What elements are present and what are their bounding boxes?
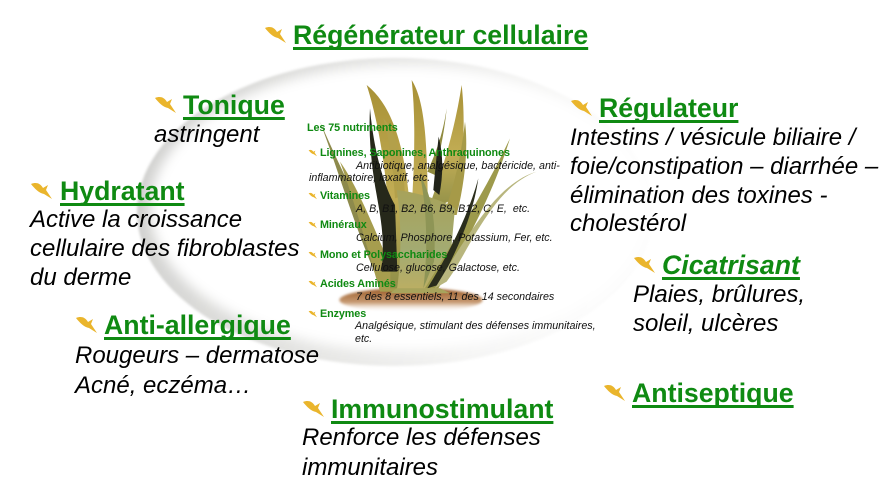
item: Vitamines [308,190,530,215]
description: foie/constipation – diarrhée – [570,153,878,180]
description: Rougeurs – dermatose [75,342,319,369]
description: Renforce les défenses [302,424,541,451]
item: Vitamines: A, B, B1, B2, B6, B9, B12, C, E, etc. [356,203,530,215]
item: Lignines [308,147,560,184]
heading: Hydratant [60,176,185,206]
item: Lignines: Antibiotique, analgésique, bactéricide, anti- [356,160,560,172]
description [633,281,805,337]
heading: Régénérateur cellulaire [265,20,588,50]
icon: bird [634,257,655,273]
item: Vitamines: Vitamines [320,190,370,202]
item: Mono et Polysaccharides [308,249,520,274]
icon: bird [604,385,625,401]
heading: Tonique [183,90,285,120]
item: Lignines: inflammatoire, laxatif, etc. [309,172,430,184]
item: Acides Aminés: 7 des 8 essentiels, 11 des 14 secondaires [356,291,554,303]
description: soleil, ulcères [633,310,778,337]
item: Enzymes [308,308,596,345]
heading: Antiseptique [632,378,794,408]
icon: bird [571,100,592,116]
icon: bird [265,27,286,43]
item: Enzymes: Analgésique, stimulant des défenses immunitaires, [355,320,596,332]
description: immunitaires [302,454,438,480]
description [302,424,541,480]
heading: Régulateur [599,93,738,123]
icon: bird [155,97,176,113]
description: cholestérol [570,210,686,237]
block: Anti-allergique [74,310,319,398]
label: Régénérateur cellulaire [293,20,588,50]
description: élimination des toxines - [570,182,827,209]
block: Immunostimulant [302,394,554,480]
nutrients title: Les 75 nutriments [307,122,398,134]
item: Enzymes: etc. [355,333,372,345]
description: Intestins / vésicule biliaire / [570,124,855,151]
item: Minéraux: Calcium, Phosphore, Potassium, Fer, etc. [356,232,553,244]
block: Tonique [154,90,285,148]
item: Acides Aminés: Acides Aminés [320,278,396,290]
description: cellulaire des fibroblastes [30,235,299,262]
item: Acides Aminés [308,278,554,303]
description: Active la croissance [30,206,242,233]
icon: bird [303,401,324,417]
description [28,206,299,291]
icon: bird [76,317,97,333]
item: Lignines: Lignines, Saponines, Anthraquinones [320,147,510,159]
description: Acné, eczéma… [75,372,251,398]
block: Régulateur [570,93,878,237]
item: Mono et Polysaccharides: Cellulose, glucose, Galactose, etc. [356,262,520,274]
description: du derme [30,264,131,291]
icon: bird [31,183,52,199]
item: Mono et Polysaccharides: Mono et Polysaccharides [320,249,447,261]
block: Hydratant [28,176,299,291]
heading: Immunostimulant [331,394,553,424]
block: Antiseptique [604,378,794,408]
block: Cicatrisant [633,250,805,337]
item: Minéraux: Minéraux [320,219,367,231]
heading: Cicatrisant [662,250,800,280]
heading: Anti-allergique [104,310,291,340]
description: Plaies, brûlures, [633,281,805,308]
description [74,342,319,398]
item: Minéraux [308,219,553,244]
item: Enzymes: Enzymes [320,308,366,320]
description [570,124,878,237]
panel: nutrients list [307,122,596,345]
description: astringent [154,121,259,148]
